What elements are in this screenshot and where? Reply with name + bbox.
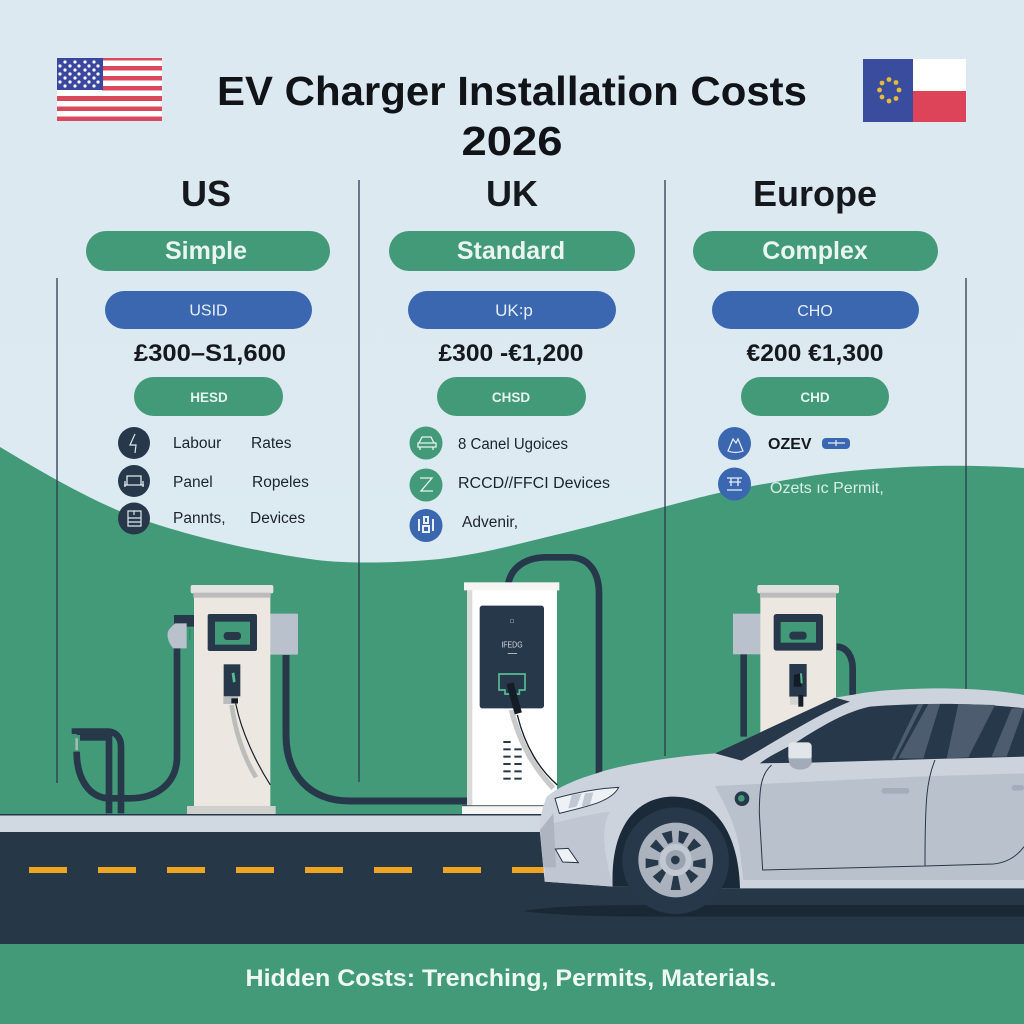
badge: OZEV tag [822, 438, 850, 449]
flag: USA [57, 58, 162, 121]
label: Pannts, Devices [173, 510, 305, 527]
pill: Standard: Standard [457, 237, 565, 265]
window reflections [892, 704, 1024, 759]
charger: left [72, 585, 298, 814]
ground shadow [523, 905, 1024, 917]
label: 8 Canel Ugoices: 8 Canel Ugoices [458, 436, 568, 453]
door handles [881, 788, 909, 794]
column: Europe [693, 173, 938, 416]
label: Pannts, Devices: Devices [250, 510, 305, 527]
pill: Simple: Simple [165, 237, 247, 265]
label: Panel Ropeles [173, 474, 309, 491]
pill: Standard [389, 231, 635, 271]
pill: CHD [741, 377, 889, 416]
pill: CHSD [437, 377, 586, 416]
rim [638, 823, 713, 897]
pill: HESD: HESD [190, 390, 228, 405]
side window [760, 704, 1024, 763]
column: UK [389, 173, 635, 416]
title: EV Charger Installation Costs [217, 68, 807, 114]
label: Panel Ropeles: Ropeles [252, 474, 309, 491]
pill: currency CHO: CHO [797, 303, 833, 320]
pill: Complex [693, 231, 938, 271]
charger: center: ☐ [510, 619, 515, 625]
road [0, 832, 1024, 944]
footer banner [0, 944, 1024, 1024]
car [540, 688, 1024, 914]
door lines [759, 760, 1024, 870]
body shell [540, 688, 1024, 888]
label: RCCD//FFCI Devices: RCCD//FFCI Devices [458, 475, 610, 492]
headlight [555, 787, 619, 813]
list: US cost factors [118, 427, 309, 534]
label: Panel Ropeles: Panel [173, 474, 213, 491]
icon: panel [118, 465, 150, 497]
connector [223, 697, 238, 704]
heading: Europe: Europe [753, 173, 877, 214]
screen [208, 614, 257, 651]
windshield [715, 698, 850, 761]
title: 2026 [462, 118, 562, 164]
label: Pannts, Devices: Pannts, [173, 510, 226, 527]
label: Advenir,: Advenir, [462, 514, 518, 531]
list: UK cost factors [410, 426, 610, 542]
price range: €200 €1,300 [746, 340, 884, 367]
column divider lines [57, 180, 966, 783]
badge [735, 791, 749, 806]
vent [503, 741, 522, 780]
pill: currency UK: UK꞉p [495, 301, 533, 320]
pill: HESD [134, 377, 283, 416]
left cables [77, 647, 177, 813]
icon: adviser [410, 509, 442, 542]
column: US [86, 173, 330, 416]
icon: lightning [118, 427, 150, 459]
tyre [622, 807, 729, 914]
pill: currency USD [105, 291, 312, 329]
pill: CHD: CHD [800, 390, 830, 405]
heading: UK: UK [486, 173, 538, 214]
icon: Z [410, 468, 442, 502]
flag: Europe [863, 59, 966, 122]
charger and car [523, 585, 1024, 917]
cable between chargers [286, 655, 470, 801]
mirror [788, 742, 812, 761]
label: Labour Rates [173, 435, 292, 452]
list: Europe cost factors [718, 427, 884, 500]
lower body shade [715, 773, 1024, 880]
pill: currency USD: USID [189, 302, 228, 320]
side box [269, 614, 298, 655]
icon: grant [718, 427, 751, 460]
pill: currency UK [408, 291, 616, 329]
label: Labour Rates: Rates [251, 435, 292, 452]
charger: right [733, 585, 853, 737]
charger: center: IFEDG [501, 640, 523, 649]
label: OZEV: OZEV [768, 436, 812, 453]
price range: £300–S1,600 [134, 340, 286, 367]
sidewalk [0, 814, 1024, 832]
body [467, 590, 557, 807]
icon: car [410, 426, 442, 460]
pill: Simple [86, 231, 330, 271]
wheel arch [612, 797, 740, 888]
footer banner: Hidden Costs: Trenching, Permits, Materials. [246, 965, 776, 992]
plug holster [174, 615, 194, 627]
pill: Complex: Complex [762, 237, 868, 265]
background green hill [0, 447, 1024, 830]
plug and cable [511, 710, 553, 788]
screen [480, 606, 544, 708]
pill: CHSD: CHSD [492, 390, 530, 405]
pill: currency CHO [712, 291, 919, 329]
charger: center [440, 557, 599, 814]
loop cable [508, 557, 599, 773]
heading: US: US [181, 173, 231, 214]
icon: box [118, 502, 150, 534]
icon: permit [718, 468, 751, 500]
label: Ozets ic Permit,: Ozets ıc Permit, [770, 480, 884, 497]
fog light [555, 848, 578, 863]
body [194, 593, 270, 807]
road lane dashes [29, 867, 550, 873]
price range: £300 -€1,200 [438, 340, 584, 367]
label: Labour Rates: Labour [173, 435, 221, 452]
title [217, 68, 807, 164]
